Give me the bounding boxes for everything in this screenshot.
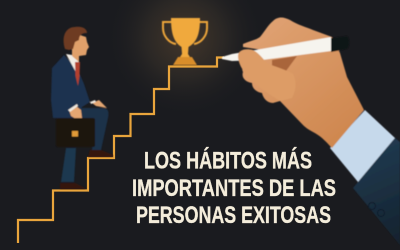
title line 3: PERSONAS EXITOSAS — [136, 202, 331, 229]
neck and face — [72, 35, 89, 62]
title line 2: IMPORTANTES DE LAS — [132, 175, 336, 202]
title line 1: LOS HÁBITOS MÁS — [144, 146, 312, 174]
front shoe — [88, 150, 113, 157]
front leg — [80, 108, 108, 150]
thumb — [238, 49, 296, 101]
jacket sleeve — [353, 138, 400, 245]
near hand — [69, 106, 82, 119]
hair — [64, 27, 87, 50]
title — [132, 146, 336, 229]
shirt cuff — [330, 110, 395, 182]
back leg — [61, 148, 76, 182]
marker cap — [331, 36, 349, 52]
shirt collar — [66, 54, 79, 76]
briefcase clasp — [72, 131, 78, 136]
golden stairs line — [18, 58, 224, 243]
suit jacket — [51, 55, 90, 118]
back shoe — [60, 183, 85, 189]
palm shadow — [272, 56, 297, 71]
marker body — [222, 37, 331, 61]
sleeve buttons — [368, 202, 384, 216]
businessman — [51, 27, 113, 189]
palm and fingers — [242, 18, 364, 148]
tie — [75, 62, 80, 86]
hand holding marker — [222, 18, 400, 245]
far hand — [92, 100, 107, 108]
shirt cuffs — [68, 100, 96, 112]
icon: trophy — [163, 18, 207, 65]
briefcase — [56, 118, 95, 147]
